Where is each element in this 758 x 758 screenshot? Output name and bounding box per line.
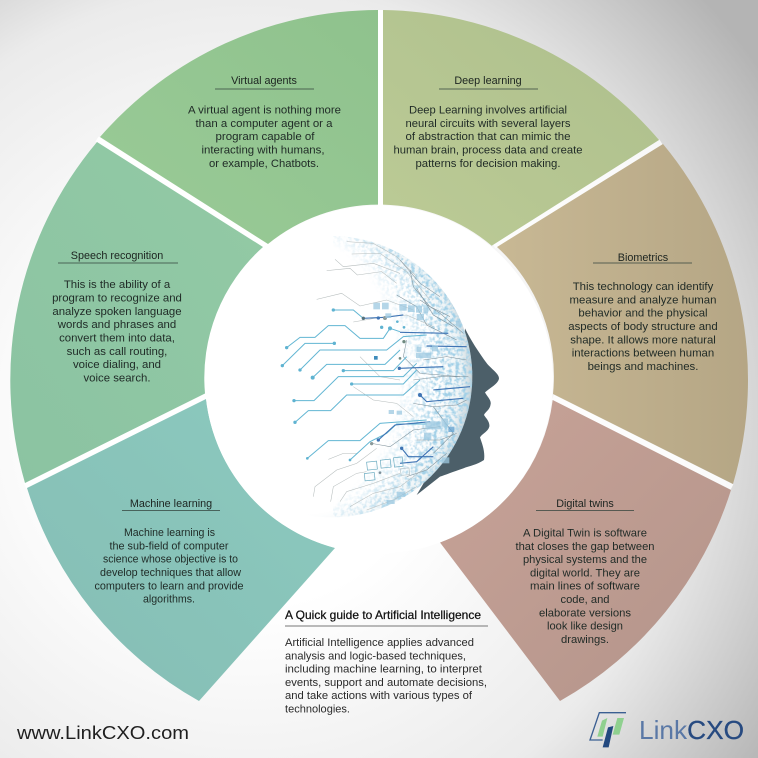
panel: quick guide (285, 608, 488, 716)
sphere (191, 236, 472, 517)
panel: deep learning (383, 10, 659, 246)
center white circle (205, 206, 553, 554)
text: digital twins description: drawings. (561, 634, 609, 646)
face shadow (417, 328, 499, 495)
text: machine learning description: science whose objective is to (103, 554, 238, 566)
text: machine learning description: computers to learn and provide (94, 580, 244, 592)
sphere data texture (333, 233, 477, 520)
text: virtual agents description: than a computer agent or a (196, 118, 333, 130)
text: deep learning description: human brain, process data and create (394, 144, 582, 156)
text: speech recognition description: words and phrases and (57, 319, 176, 331)
text: deep learning description: Deep Learning involves artificial (409, 104, 567, 116)
text: digital twins description: code, and (560, 594, 610, 606)
logo wordmark: LinkCXO (639, 715, 744, 745)
text: speech recognition description: convert them into data, (59, 332, 175, 344)
text: quick guide description: Artificial Intelligence applies advanced (285, 637, 474, 649)
text: speech recognition description: analyze spoken language (52, 306, 182, 318)
heading: quick guide: A Quick guide to Artificial Intelligence (285, 608, 481, 622)
text: virtual agents description (188, 104, 341, 170)
text: biometrics description: shape. It allows more natural (570, 334, 716, 346)
icon: logo mark (590, 713, 626, 747)
heading: biometrics: Biometrics (618, 252, 669, 264)
text: speech recognition description: This is the ability of a (64, 279, 171, 291)
text: speech recognition description (52, 279, 182, 384)
text: deep learning description: of abstraction that can mimic the (406, 131, 570, 143)
text: biometrics description: measure and analyze human (570, 294, 716, 306)
text: digital twins description: look like design (547, 621, 623, 633)
text: quick guide description: events, support and automate decisions, (285, 677, 487, 689)
blue circuit traces (282, 310, 427, 460)
heading: deep learning: Deep learning (454, 75, 522, 87)
panel: machine learning (27, 399, 335, 701)
text: biometrics description: beings and machines. (588, 361, 698, 373)
panel: biometrics (497, 144, 748, 484)
text: deep learning description: neural circuits with several layers (406, 118, 571, 130)
text: digital twins description: A Digital Twin is software (523, 528, 647, 540)
text: deep learning description (394, 104, 582, 170)
text: quick guide description (285, 637, 487, 716)
text: speech recognition description: voice dialing, and (73, 359, 161, 371)
panel: virtual agents (100, 10, 378, 244)
logo: LinkCXO (590, 713, 744, 747)
heading: virtual agents: Virtual agents (231, 75, 298, 87)
text: digital twins description: elaborate versions (539, 607, 631, 619)
website url: www.LinkCXO.com (16, 722, 189, 743)
panel: speech recognition (10, 142, 263, 483)
text: quick guide description: analysis and logic-based techniques, (285, 650, 466, 662)
text: machine learning description: the sub-field of computer (110, 540, 229, 552)
heading: speech recognition: Speech recognition (71, 250, 163, 262)
text: virtual agents description: program capable of (216, 131, 315, 143)
heading: digital twins: Digital twins (556, 498, 614, 510)
text: machine learning description: algorithms. (143, 594, 195, 606)
text: digital twins description: physical systems and the (523, 554, 647, 566)
text: biometrics description (568, 281, 718, 373)
text: biometrics description: behavior and the physical (578, 308, 708, 320)
text: virtual agents description: interacting with humans, (202, 144, 324, 156)
text: machine learning description: Machine learning is (124, 527, 215, 539)
text: digital twins description: digital world. They are (530, 567, 640, 579)
data squares (364, 303, 461, 504)
text: digital twins description (516, 528, 654, 646)
text: virtual agents description: A virtual agent is nothing more (188, 104, 341, 116)
text: quick guide description: and take actions with various types of (285, 690, 473, 702)
text: quick guide description: technologies. (285, 704, 350, 716)
text: quick guide description: including machine learning, to interpret (285, 664, 483, 676)
text: deep learning description: patterns for decision making. (416, 158, 560, 170)
text: digital twins description: main lines of software (530, 581, 640, 593)
dark blue traces (363, 315, 470, 463)
heading: machine learning: Machine learning (130, 498, 212, 510)
text: digital twins description: that closes the gap between (516, 541, 654, 553)
illustration: circuit head (280, 236, 499, 517)
text: speech recognition description: such as call routing, (67, 346, 167, 358)
text: speech recognition description: voice search. (83, 372, 151, 384)
panel: digital twins (440, 400, 731, 701)
text: machine learning description (94, 527, 244, 606)
text: biometrics description: interactions between human (572, 348, 714, 360)
text: biometrics description: This technology can identify (573, 281, 714, 293)
text: speech recognition description: program to recognize and (52, 292, 182, 304)
text: machine learning description: develop techniques that allow (100, 567, 242, 579)
circuit nodes (281, 308, 422, 474)
gray circuit traces (313, 242, 468, 510)
text: virtual agents description: or example, Chatbots. (209, 158, 319, 170)
text: biometrics description: aspects of body structure and (568, 321, 718, 333)
